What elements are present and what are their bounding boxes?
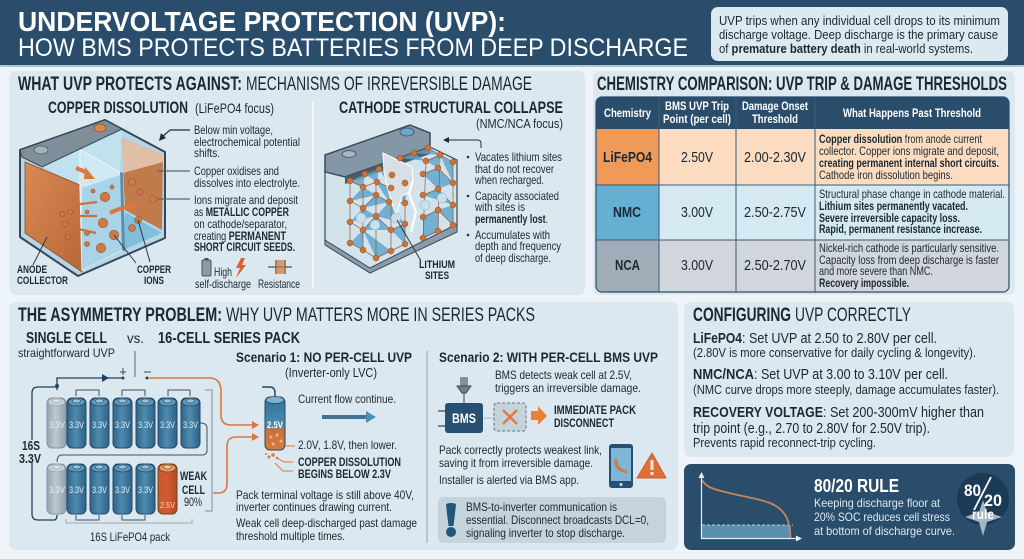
row: NMC: [613, 187, 1005, 236]
copper labels: COLLECTOR: [17, 275, 68, 287]
80/20 rule text: [814, 476, 955, 538]
scenario 2 body: saving it from irreversible damage.: [439, 456, 593, 470]
scenario 2 body: Installer is alerted via BMS app.: [439, 473, 579, 487]
immediate pack disconnect: IMMEDIATE PACK: [554, 403, 636, 417]
copper dissolution notes: Ions migrate and deposit: [194, 193, 299, 207]
recovery voltage setting: [693, 404, 984, 450]
scenario 2 detection text: BMS detects weak cell at 2.5V,: [495, 368, 632, 382]
series pack diagram: 3.3V: [183, 420, 198, 430]
series pack diagram: 3.3V: [115, 485, 130, 495]
scenario 1 heading: Scenario 1: NO PER-CELL UVP: [236, 349, 412, 365]
pack labels: 16S: [22, 438, 40, 453]
table header row: Damage Onset: [742, 99, 808, 113]
row: NCA: NCA: [615, 257, 640, 274]
scenario 1 body: threshold multiple times.: [236, 529, 345, 543]
copper dissolution notes: dissolves into electrolyte.: [194, 176, 300, 190]
cathode bullets: of deep discharge.: [475, 251, 551, 265]
configuring heading: UVP CORRECTLY: [795, 305, 911, 326]
cathode bullets: Accumulates with: [475, 228, 550, 242]
scenario 1 body: [236, 488, 417, 543]
table header row: [604, 99, 981, 126]
open switch icon: [484, 403, 526, 431]
scenario 2 body: [439, 443, 602, 487]
LiFePO4 setting: LiFePO4: [693, 330, 743, 347]
series pack diagram: 3.3V: [69, 420, 84, 430]
asymmetry heading: THE ASYMMETRY PROBLEM:: [18, 305, 222, 326]
summary callout: [711, 7, 1008, 61]
80/20 badge: [957, 473, 1009, 536]
panel heading: [18, 74, 532, 95]
copper dissolution notes: Copper oxidises and: [194, 164, 279, 178]
table header row: BMS UVP Trip: [665, 99, 729, 113]
LiFePO4 setting: (2.80V is more conservative for daily cycling & longevity).: [693, 345, 976, 360]
scenario 2 heading: Scenario 2: WITH PER-CELL BMS UVP: [439, 349, 658, 365]
copper dissolution notes: [194, 123, 300, 254]
copper labels: [17, 264, 171, 287]
copper labels: COPPER: [137, 264, 171, 276]
icon: exclamation mark: [446, 503, 456, 537]
pack labels: 90%: [184, 495, 202, 509]
callout: inverter communication: BMS-to-inverter communication is: [466, 500, 617, 514]
cathode bullets: when recharged.: [474, 173, 544, 187]
pack labels: CELL: [182, 483, 205, 497]
copper dissolution heading: COPPER DISSOLUTION: [48, 98, 188, 117]
table header row: Chemistry: [604, 106, 651, 120]
icon: phone: [609, 444, 633, 488]
row: LiFePO4: Cathode iron dissolution begins.: [819, 168, 953, 182]
configuring heading: CONFIGURING: [693, 305, 791, 326]
row: NCA: Recovery impossible.: [819, 276, 909, 290]
cathode bullets: Capacity associated: [475, 189, 559, 203]
copper dissolution heading: (LiFePO4 focus): [195, 100, 274, 116]
arrow: cathode callout: [444, 140, 481, 148]
cathode heading: (NMC/NCA focus): [476, 116, 563, 131]
row: LiFePO4: LiFePO4: [603, 149, 653, 166]
pack labels: WEAK: [180, 469, 207, 483]
recovery voltage setting: RECOVERY VOLTAGE: [693, 404, 823, 421]
series pack diagram: [32, 351, 259, 523]
table header row: Threshold: [752, 112, 798, 126]
panel heading: WHAT UVP PROTECTS AGAINST:: [18, 74, 242, 95]
scenario 1 current flow: [298, 392, 396, 423]
80/20 rule text: 20% SOC reduces cell stress: [814, 510, 950, 524]
scenario 2 detection text: triggers an irreversible damage.: [495, 381, 641, 395]
single cell vs series pack heading: [18, 330, 300, 360]
row: NCA: 2.50-2.70V: [744, 257, 806, 274]
NMC/NCA setting: [693, 366, 999, 397]
scenario 1 body: Pack terminal voltage is still above 40V,: [236, 488, 414, 502]
80/20 rule text: Keeping discharge floor at: [814, 496, 941, 510]
copper labels: ANODE: [17, 264, 47, 276]
copper dissolution notes: on cathode/separator,: [194, 217, 287, 231]
row: NCA: 3.00V: [681, 257, 713, 274]
panel: the asymmetry problem: [9, 302, 678, 550]
arrow: case callout: [159, 130, 190, 141]
panel: configuring UVP correctly: [684, 302, 1014, 457]
battery illustration: cathode collapse: [325, 125, 457, 273]
BMS box: BMS: [452, 410, 476, 426]
row: LiFePO4: 2.00-2.30V: [744, 149, 806, 166]
failing cell illustration: 2.5V: [267, 420, 283, 430]
cathode bullets: depth and frequency: [475, 239, 561, 253]
BMS box: [438, 377, 483, 433]
row: NMC: Lithium sites permanently vacated.: [819, 199, 968, 213]
lithium sites label: SITES: [425, 270, 449, 282]
scenario 1 body: inverter continues drawing current.: [236, 500, 392, 514]
NMC/NCA setting: NMC/NCA: [693, 366, 754, 383]
series pack diagram: 3.3V: [49, 420, 65, 430]
asymmetry heading: [18, 305, 535, 326]
copper dissolution notes: Below min voltage,: [194, 123, 273, 137]
NMC/NCA setting: : Set UVP at 3.00 to 3.10V per cell.: [754, 366, 948, 383]
callout: inverter communication: essential. Disconnect broadcasts DCL=0,: [466, 513, 649, 527]
cathode heading: [339, 98, 563, 131]
lithium sites label: LITHIUM: [419, 259, 455, 271]
scenario 2 body: Pack correctly protects weakest link,: [439, 443, 602, 457]
series pack diagram: 3.3V: [69, 485, 84, 495]
configuring heading: [693, 305, 911, 326]
panel: what UVP protects against: [9, 71, 585, 295]
scenario 1 voltages: COPPER DISSOLUTION: [298, 455, 401, 469]
comparison table: [596, 97, 1009, 292]
cathode heading: CATHODE STRUCTURAL COLLAPSE: [339, 98, 563, 117]
summary callout: of premature battery death in real-world systems.: [719, 41, 973, 56]
immediate pack disconnect: DISCONNECT: [554, 416, 615, 430]
row: LiFePO4: 2.50V: [681, 149, 713, 166]
copper labels: IONS: [144, 275, 164, 287]
80/20 rule text: at bottom of discharge curve.: [814, 524, 955, 538]
table header row: Point (per cell): [663, 112, 731, 126]
80/20 badge: 80: [964, 481, 981, 500]
row: NMC: 3.00V: [681, 204, 713, 221]
failing cell illustration: [262, 387, 295, 471]
callout: inverter communication: signaling inverter to stop discharge.: [466, 526, 625, 540]
single cell vs series pack heading: 16-CELL SERIES PACK: [158, 330, 300, 347]
copper dissolution notes: creating PERMANENT: [194, 229, 286, 243]
row: NCA: [615, 241, 999, 290]
80/20 badge: 20: [984, 491, 1002, 510]
80/20 badge: rule: [972, 506, 994, 522]
LiFePO4 setting: [693, 330, 976, 360]
cathode bullets: with sites is: [474, 200, 525, 214]
recovery voltage setting: : Set 200-300mV higher than: [823, 404, 984, 421]
LiFePO4 setting: : Set UVP at 2.50 to 2.80V per cell.: [742, 330, 937, 347]
scenario 1 heading: [236, 349, 412, 380]
row: NMC: Severe irreversible capacity loss.: [819, 211, 960, 225]
table header row: What Happens Past Threshold: [843, 106, 981, 120]
series pack diagram: 3.3V: [160, 420, 175, 430]
copper dissolution notes: SHORT CIRCUIT SEEDS.: [194, 240, 295, 254]
panel: chemistry comparison: [593, 71, 1015, 295]
single cell vs series pack heading: vs.: [127, 330, 144, 346]
cathode bullets: Vacates lithium sites: [475, 150, 562, 164]
pack labels: 16S LiFePO4 pack: [90, 530, 171, 544]
pack labels: [19, 438, 207, 544]
scenario 1 voltages: 2.0V, 1.8V, then lower.: [298, 438, 397, 452]
recovery voltage setting: trip point (e.g., 2.70 to 2.80V for 2.50V trip).: [693, 420, 930, 437]
panel heading: MECHANISMS OF IRREVERSIBLE DAMAGE: [246, 74, 532, 95]
80/20 rule text: 80/20 RULE: [814, 476, 899, 496]
weak cell: 2.5V: [160, 500, 175, 510]
discharge curve chart: [698, 472, 802, 542]
series pack diagram: 3.3V: [92, 420, 107, 430]
cathode bullets: that do not recover: [475, 162, 554, 176]
scenario 1 voltages: [298, 438, 401, 481]
arrow: disconnect: [531, 406, 547, 425]
series pack diagram: 3.3V: [138, 420, 153, 430]
cathode bullets: permanently lost.: [475, 212, 548, 226]
icon: high self-discharge: High: [214, 265, 232, 279]
lithium sites label: [419, 259, 455, 282]
recovery voltage setting: Prevents rapid reconnect-trip cycling.: [693, 435, 876, 450]
series pack diagram: 3.3V: [138, 485, 153, 495]
header banner: [0, 0, 1024, 67]
row: NCA: and more severe than NMC.: [819, 264, 933, 278]
scenario 1 body: Weak cell deep-discharged past damage: [236, 516, 417, 530]
immediate pack disconnect: [554, 403, 636, 430]
scenario 1 current flow: Current flow continue.: [298, 392, 396, 406]
icon: warning triangle: [637, 453, 666, 478]
arrowhead: [443, 137, 449, 143]
weak cell: [158, 464, 177, 514]
title: HOW BMS PROTECTS BATTERIES FROM DEEP DISCHARGE: [18, 34, 688, 62]
single cell vs series pack heading: SINGLE CELL: [26, 330, 107, 347]
scenario 1 heading: (Inverter-only LVC): [285, 365, 377, 380]
battery illustration: copper dissolution: [20, 120, 165, 276]
title: [18, 6, 688, 62]
series pack diagram: 3.3V: [49, 485, 65, 495]
cathode bullets: [467, 150, 562, 265]
row: LiFePO4: Copper dissolution from anode current: [819, 132, 983, 146]
icon: resistance: [258, 260, 300, 291]
icon: high self-discharge: self-discharge: [195, 277, 251, 291]
copper dissolution notes: shifts.: [194, 146, 220, 160]
title: UNDERVOLTAGE PROTECTION (UVP):: [18, 6, 506, 37]
copper dissolution notes: as METALLIC COPPER: [194, 205, 289, 219]
leader: electrolyte: [157, 171, 190, 199]
row: NMC: NMC: [613, 204, 641, 221]
row: LiFePO4: [603, 132, 999, 182]
pack labels: 3.3V: [19, 451, 41, 466]
icon: resistance: Resistance: [258, 277, 300, 291]
panel: 80/20 rule: [684, 464, 1015, 550]
series pack diagram: 3.3V: [92, 485, 107, 495]
row: NMC: 2.50-2.75V: [744, 204, 806, 221]
series pack diagram: 3.3V: [115, 420, 130, 430]
icon: high self-discharge: [195, 258, 251, 291]
single cell vs series pack heading: straightforward UVP: [18, 346, 115, 360]
callout: inverter communication: [438, 497, 666, 543]
scenario 2 detection text: [495, 368, 641, 395]
copper dissolution notes: electrochemical potential: [194, 135, 300, 149]
scenario 1 voltages: BEGINS BELOW 2.3V: [298, 467, 391, 481]
asymmetry heading: WHY UVP MATTERS MORE IN SERIES PACKS: [226, 305, 535, 326]
